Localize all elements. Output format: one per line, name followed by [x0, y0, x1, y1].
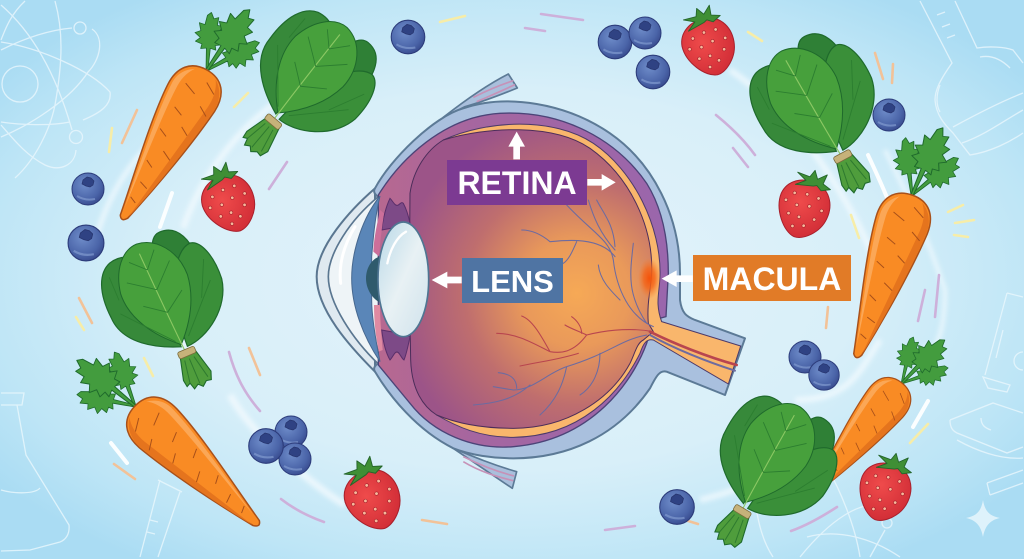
label: lens: LENS: [471, 264, 554, 299]
arrow to macula: [662, 270, 693, 287]
iris: [352, 196, 380, 362]
flask sketch bottom left: [1, 393, 182, 557]
dish sketch: [950, 403, 1023, 495]
orange dashes: [79, 53, 893, 524]
blueberries: right pair: [789, 341, 839, 390]
strawberry: top: [676, 2, 739, 80]
spinach: middle left: [88, 217, 258, 409]
pupil: [366, 257, 379, 302]
top eye muscle: [443, 74, 517, 117]
label: retina: [447, 160, 587, 205]
macula spot: [638, 258, 661, 299]
sparkle: [966, 500, 1000, 537]
strawberry: left: [193, 158, 261, 239]
white dashes: [111, 155, 928, 463]
choroid: [378, 113, 668, 447]
arrow to retina side: [587, 174, 616, 191]
label: lens: [462, 258, 563, 303]
blue veins: [473, 200, 653, 415]
strawberry: bottom: [335, 451, 407, 537]
label: retina: RETINA: [457, 165, 577, 201]
vitreous chamber: [409, 130, 653, 428]
label: macula: MACULA: [703, 261, 841, 297]
strawberry: right: [767, 161, 844, 246]
arrow to lens: [432, 272, 462, 288]
atom sketch top left: [1, 1, 110, 178]
spinach: top right: [734, 18, 916, 217]
label: macula: [693, 255, 851, 301]
bottom eye muscle: [443, 442, 517, 488]
spinach: top left: [206, 0, 398, 190]
atom sketch bottom right: [757, 467, 900, 557]
blueberries: left pair: [68, 173, 104, 261]
blueberry: top centre: [391, 20, 425, 54]
arrow to retina top: [508, 132, 525, 159]
nerve vessels: [650, 332, 737, 365]
carrot: right lower: [789, 315, 969, 515]
yellow dashes: [76, 16, 974, 443]
purple dashes: [229, 14, 939, 531]
strawberry: bottom right: [848, 444, 925, 529]
blood vessels: [473, 200, 737, 415]
retina layer and optic nerve: [437, 124, 741, 437]
carrot: bottom left: [50, 326, 285, 557]
lens: [378, 222, 429, 337]
flask sketch top right: [920, 1, 1023, 155]
blueberry: top right: [873, 99, 905, 131]
carrot: right upper: [821, 112, 978, 372]
red arteries: [497, 316, 653, 366]
ciliary body: [373, 198, 410, 360]
spinach: bottom right: [675, 378, 857, 559]
microscope sketch: [983, 293, 1023, 392]
eye cross-section: [317, 74, 745, 488]
sclera: [374, 101, 745, 458]
blueberries: top trio: [598, 17, 670, 89]
cornea: [317, 188, 378, 372]
swirl arcs: [97, 70, 945, 505]
blueberry: bottom: [660, 490, 694, 524]
carrot: top left: [89, 0, 283, 241]
blueberries: bottom left trio: [249, 416, 311, 475]
